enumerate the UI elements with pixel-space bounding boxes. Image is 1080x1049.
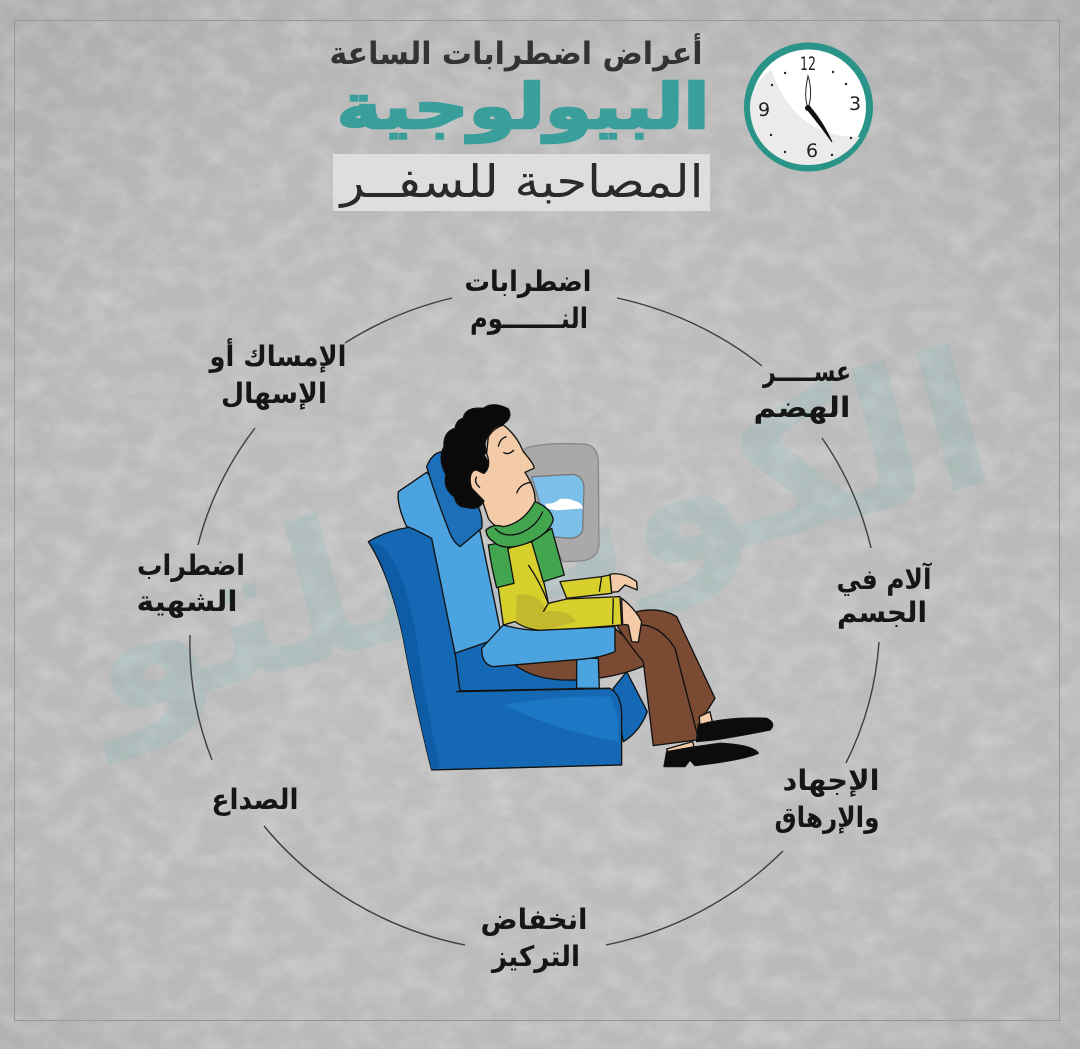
- shoes: [664, 712, 773, 767]
- label: indigestion: [754, 355, 851, 424]
- title line 1: أعراض اضطرابات الساعة: [330, 33, 702, 72]
- label: sleep disorders: اضطرابات: [464, 265, 592, 298]
- label: appetite disorder: [136, 549, 245, 618]
- armrest: [482, 625, 615, 688]
- label: body aches: الجسم: [837, 596, 927, 629]
- label: indigestion: عســـــر: [761, 355, 851, 388]
- icon: clock: 12: [800, 53, 816, 75]
- icon: clock: 6: [806, 140, 818, 162]
- label: fatigue: [774, 764, 880, 834]
- label: sleep disorders: [464, 265, 592, 335]
- icon: clock: 9: [758, 99, 770, 121]
- face: [470, 425, 535, 528]
- hair: [441, 405, 510, 508]
- label: headache: الصداع: [212, 783, 298, 816]
- watermark: الكونسلتو: [50, 308, 1014, 766]
- seat: [368, 452, 647, 770]
- sweater: [498, 542, 622, 631]
- label: constipation or diarrhoea: [208, 338, 346, 410]
- label: reduced concentration: [480, 903, 588, 973]
- label: reduced concentration: التركيز: [490, 940, 580, 973]
- label: indigestion: الهضم: [754, 391, 850, 424]
- label: sleep disorders: النـــــــوم: [470, 302, 588, 335]
- label: body aches: [836, 562, 933, 629]
- ring of arcs: [190, 298, 879, 945]
- title line 2: البيولوجية: [336, 70, 710, 143]
- icon: clock: [748, 46, 870, 168]
- label: appetite disorder: اضطراب: [137, 549, 245, 582]
- label: fatigue: والإرهاق: [774, 801, 880, 834]
- label: body aches: آلام في: [836, 562, 933, 596]
- label: constipation or diarrhoea: الإمساك أو: [208, 338, 346, 373]
- scarf: [486, 502, 564, 588]
- label: constipation or diarrhoea: الإسهال: [221, 377, 327, 410]
- icon: clock: 3: [849, 93, 861, 115]
- label: fatigue: الإجهاد: [782, 764, 880, 797]
- label: appetite disorder: الشهية: [136, 585, 238, 618]
- label: reduced concentration: انخفاض: [480, 903, 588, 936]
- window: [520, 444, 599, 562]
- hands: [610, 574, 642, 642]
- legs and lap: [515, 610, 715, 746]
- subtitle box: المصاحبة للسفــر: [338, 155, 704, 208]
- illustration: man sleeping in airplane seat: [368, 405, 773, 770]
- facial features: [476, 437, 532, 493]
